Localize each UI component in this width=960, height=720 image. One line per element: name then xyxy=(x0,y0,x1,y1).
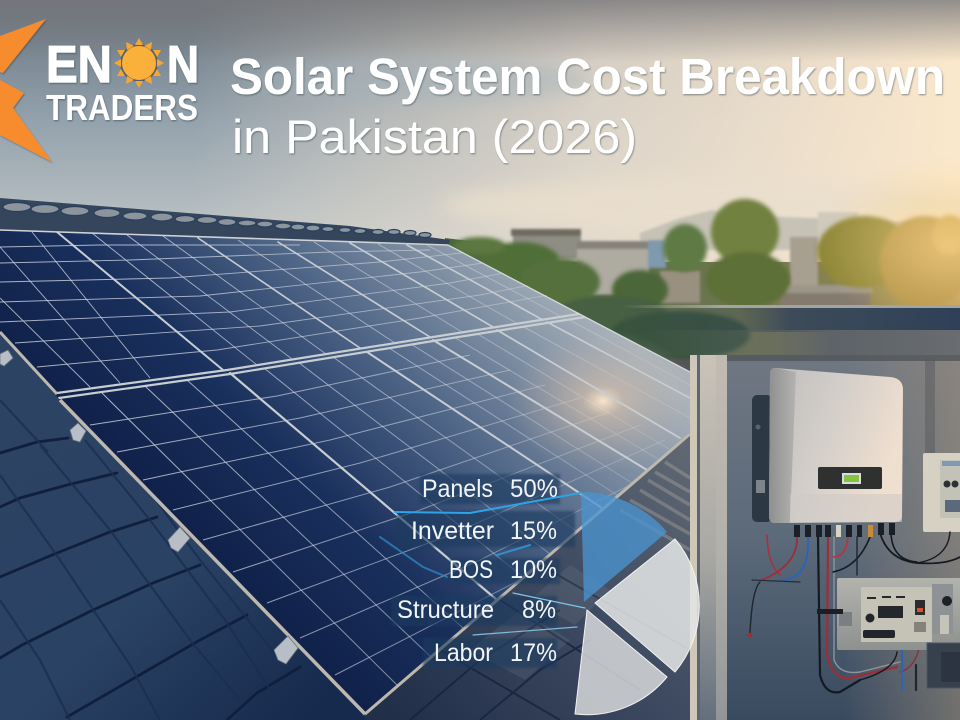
label: Invetter 15%: Invetter xyxy=(411,517,494,545)
wall post xyxy=(690,355,727,720)
pie slice: blue xyxy=(581,492,667,602)
sun reflection xyxy=(508,329,698,473)
label: BOS 10%: BOS xyxy=(449,556,493,584)
label: Invetter 15% xyxy=(411,517,557,545)
background: town and trees xyxy=(445,155,960,359)
leader lines xyxy=(380,493,585,635)
title xyxy=(230,48,945,163)
label: Panels 50% xyxy=(422,475,558,503)
cable connectors xyxy=(794,523,895,537)
title line 1: Solar System Cost Breakdown xyxy=(230,48,945,105)
logo: orange bolt xyxy=(0,19,52,162)
cables xyxy=(750,532,960,692)
label: BOS 10%: 10% xyxy=(510,556,557,584)
pie chart xyxy=(575,492,699,715)
logo: wordmark TRADERS: TRADERS xyxy=(46,87,198,128)
pie slice: light right xyxy=(595,539,699,672)
roof tiles: ridge xyxy=(0,198,450,247)
label: Labor 17%: 17% xyxy=(510,639,557,667)
inverter display xyxy=(818,467,882,489)
label: Labor 17% xyxy=(434,639,557,667)
upper row cell grid xyxy=(0,232,565,387)
label: Invetter 15%: 15% xyxy=(510,517,557,545)
logo: wordmark ENON: N xyxy=(167,36,199,94)
inverter unit xyxy=(752,368,903,523)
label: Structure 8%: 8% xyxy=(522,596,556,624)
mounting clamps xyxy=(0,350,298,664)
label: Structure 8%: Structure xyxy=(397,596,494,624)
pie slice: light bottom xyxy=(575,610,667,715)
panel frames xyxy=(57,232,690,600)
roof tiles: right side xyxy=(365,436,690,720)
small breaker box xyxy=(923,453,960,532)
roof tiles: left side xyxy=(0,330,365,720)
inset: inverter installation xyxy=(690,355,960,720)
label: BOS 10% xyxy=(449,556,557,584)
lower row cell grid xyxy=(90,318,690,685)
parapet wall xyxy=(620,305,960,355)
title line 2: in Pakistan (2026) xyxy=(232,110,637,163)
logo: sun xyxy=(114,38,164,88)
logo: wordmark ENON: EN xyxy=(46,36,112,94)
conduit frame xyxy=(927,643,960,688)
background: sky xyxy=(0,0,960,270)
outer frame xyxy=(0,230,690,714)
label: Panels 50%: 50% xyxy=(510,475,558,503)
combiner box xyxy=(817,578,960,650)
label: Structure 8% xyxy=(397,596,556,624)
label backgrounds xyxy=(391,474,575,668)
logo: wordmark ENON xyxy=(46,36,199,94)
label: Panels 50%: Panels xyxy=(422,475,493,503)
logo xyxy=(0,19,199,162)
chart labels xyxy=(397,475,558,667)
solar panels xyxy=(0,230,698,714)
label: Labor 17%: Labor xyxy=(434,639,493,667)
